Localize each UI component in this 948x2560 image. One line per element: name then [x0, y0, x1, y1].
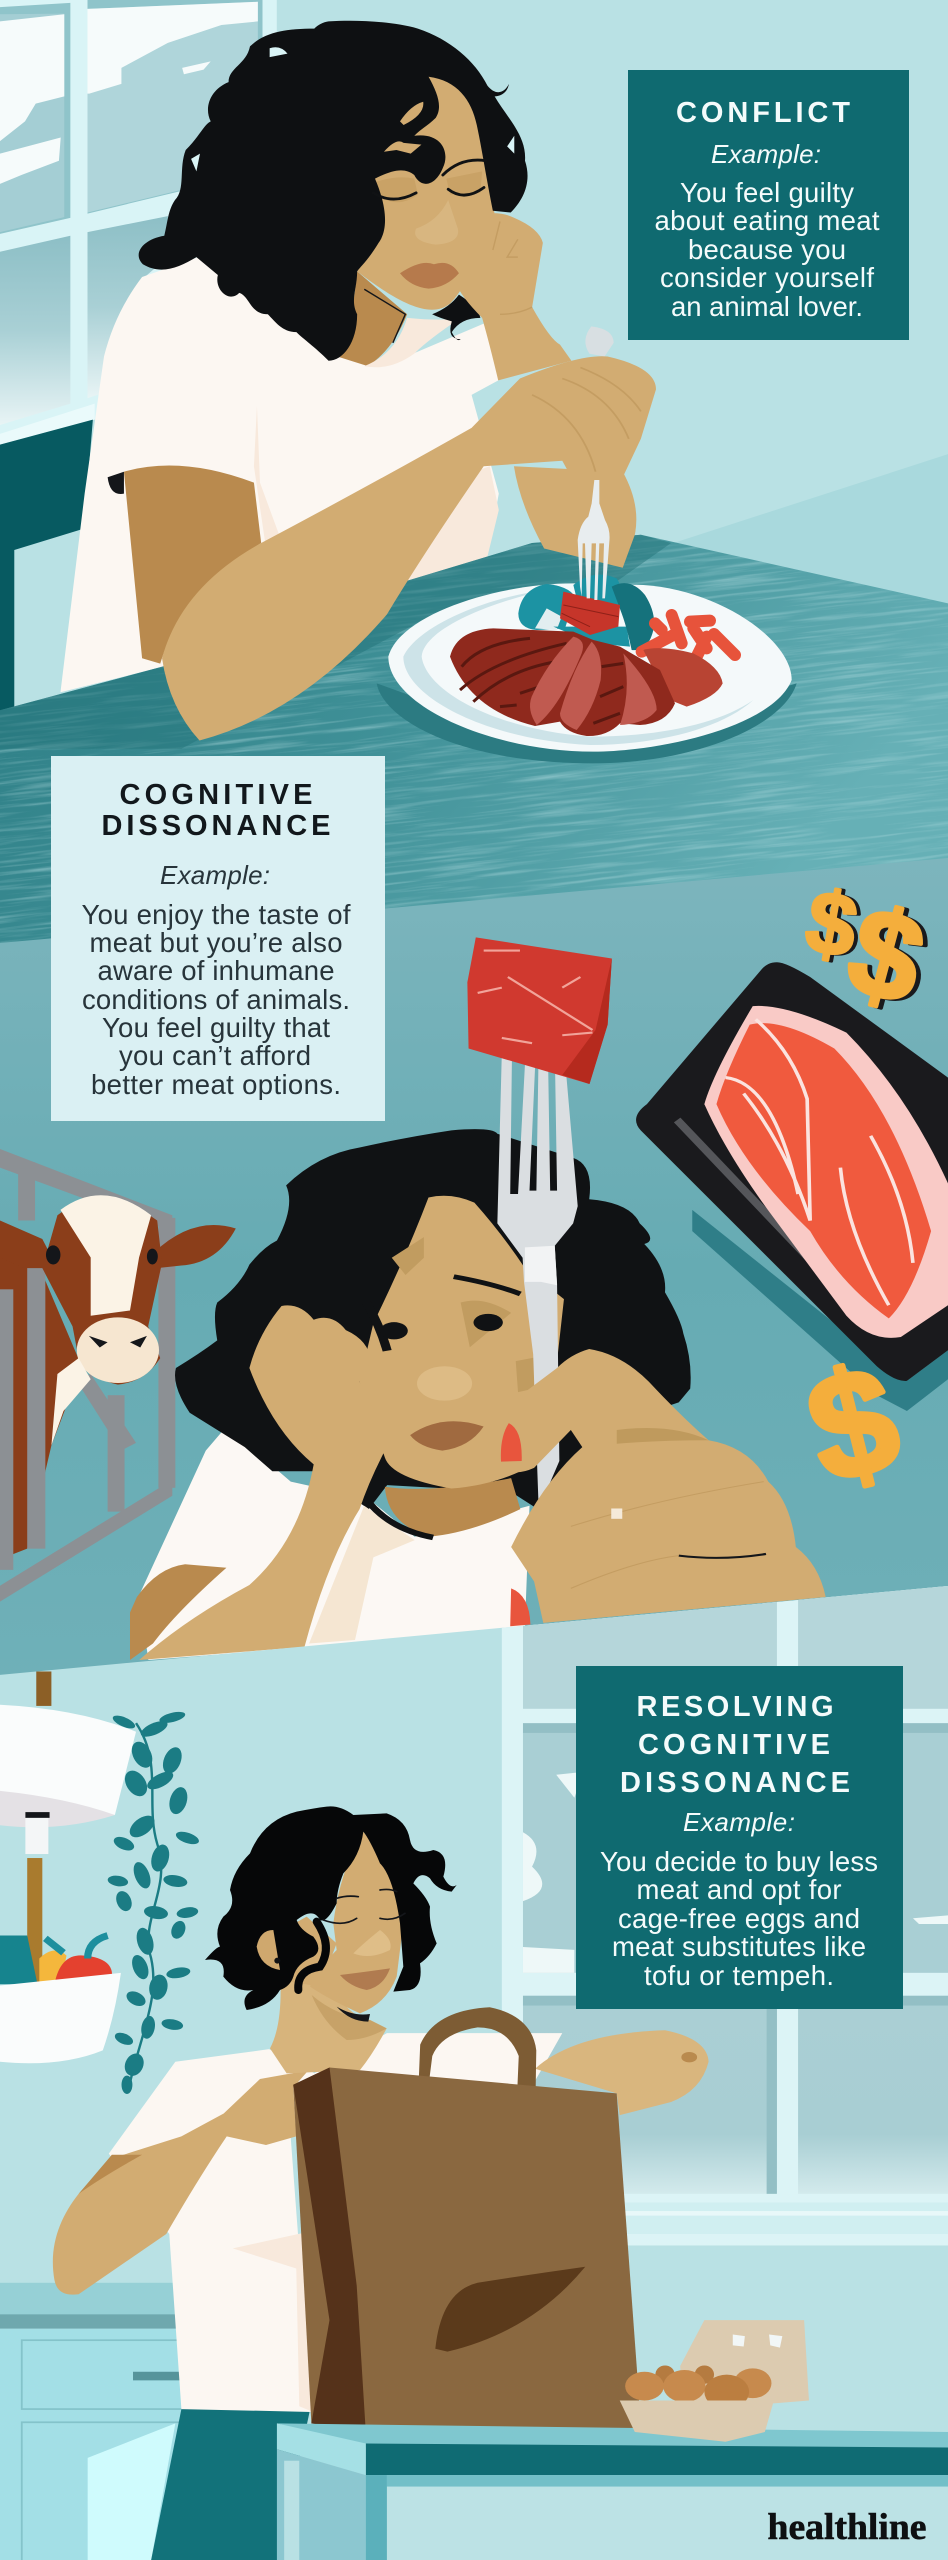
- dollar signs: $: [840, 882, 942, 1033]
- conflict body text: about eating meat: [654, 205, 880, 236]
- hair: [175, 1129, 691, 1513]
- carrots: [642, 615, 735, 657]
- pen bars: [0, 1149, 175, 1602]
- callout: conflict: [628, 70, 909, 340]
- dollar signs: $: [835, 880, 937, 1032]
- left fist and arm: [139, 1305, 385, 1660]
- conflict heading: CONFLICT: [676, 97, 850, 129]
- shirt fold shade: [233, 2231, 313, 2412]
- logo: healthline: healthline: [768, 2507, 926, 2548]
- right hand: [500, 1349, 826, 1623]
- eye shading: [375, 171, 482, 202]
- fork neck highlight: [525, 1246, 557, 1285]
- dollar signs: $: [799, 871, 864, 977]
- closed eyes and brow: [373, 160, 486, 199]
- cognitive dissonance body text: conditions of animals.: [82, 984, 350, 1015]
- chunk layers: [562, 605, 618, 627]
- paper bag: [293, 2007, 641, 2432]
- shoulder shade: [79, 2155, 142, 2194]
- panel: resolving scene: [0, 1580, 948, 2560]
- resolving body text: tofu or tempeh.: [644, 1960, 834, 1991]
- collar shade: [364, 318, 461, 367]
- red nails: [501, 1423, 530, 1626]
- dollar signs: $: [792, 1332, 914, 1516]
- resolving heading: COGNITIVE: [638, 1729, 830, 1761]
- table: [0, 535, 948, 949]
- dollar signs: [792, 871, 942, 1516]
- finger shade: [617, 1428, 709, 1444]
- lips: [410, 1421, 484, 1451]
- lips: [340, 1968, 390, 1990]
- lower curl: [432, 295, 480, 340]
- bag, counter and eggs: [277, 2007, 948, 2560]
- cognitive dissonance body text: You enjoy the taste of: [82, 899, 351, 930]
- knuckle lines: [532, 367, 641, 472]
- right steak: [643, 648, 723, 707]
- conflict body text: an animal lover.: [671, 291, 863, 322]
- neck line: [364, 289, 405, 343]
- woman's head and fist: [139, 21, 571, 380]
- cognitive dissonance body text: better meat options.: [91, 1069, 341, 1100]
- shopper head: [205, 1806, 457, 2073]
- hair gaps: [191, 47, 514, 171]
- cow head: [0, 1195, 236, 1445]
- egg carton: [620, 2320, 809, 2442]
- cognitive dissonance heading: [102, 779, 330, 842]
- fork handle top: [585, 326, 614, 357]
- tray, steak and cow: [0, 962, 948, 1602]
- resolving heading: RESOLVING: [636, 1691, 834, 1723]
- cognitive dissonance body text: meat but you’re also: [90, 927, 342, 958]
- meat chunk: [560, 592, 620, 635]
- shirt: [139, 1427, 530, 1660]
- worried woman: [130, 1048, 826, 1660]
- broccoli: [518, 575, 654, 650]
- plate shadow: [377, 683, 797, 763]
- shirt shade: [309, 1506, 415, 1643]
- resolving body text: meat substitutes like: [612, 1931, 866, 1962]
- vegetables in bowl: [0, 1936, 112, 1984]
- cognitive dissonance body text: aware of inhumane: [98, 955, 334, 986]
- wall background: [0, 0, 948, 949]
- elbow mark: [681, 2052, 697, 2062]
- window: [502, 1580, 948, 2245]
- face: [310, 1832, 403, 2013]
- main counter: [277, 2423, 948, 2560]
- ear: [257, 1930, 280, 1970]
- upper arm: [124, 466, 261, 664]
- rear counter and drawers: [0, 2283, 200, 2560]
- resolving box: [576, 1666, 903, 2009]
- shirt: [60, 257, 502, 692]
- resolving heading: DISSONANCE: [620, 1767, 850, 1799]
- kitchen background and shopper body: [0, 1580, 948, 2560]
- shirt shadow: [254, 406, 499, 581]
- plate: [388, 583, 792, 752]
- panel: conflict scene: [0, 0, 948, 943]
- callout: cognitive dissonance: [51, 756, 385, 1121]
- forehead curl: [366, 1303, 387, 1351]
- cognitive dissonance body text: you can’t afford: [119, 1040, 311, 1071]
- left arm and hand: [53, 2070, 308, 2295]
- cognitive dissonance heading: COGNITIVE: [120, 779, 312, 811]
- face: [360, 1196, 564, 1489]
- conflict body text: because you: [688, 234, 846, 265]
- dollar signs: $: [803, 871, 868, 977]
- cow body: [0, 1252, 82, 1559]
- section background: [0, 858, 948, 1680]
- fork: [497, 1048, 578, 1509]
- forehead skin patches: [384, 102, 423, 154]
- nose: [415, 200, 458, 245]
- cognitive dissonance body text: You feel guilty that: [102, 1012, 330, 1043]
- meat on fork: [467, 937, 612, 1084]
- hair: [205, 1806, 457, 2010]
- conflict body text: You feel guilty: [680, 177, 854, 208]
- earring: [274, 1958, 280, 1964]
- window and chair: [0, 0, 277, 712]
- jeans: [151, 2403, 311, 2560]
- conflict body text: [654, 177, 880, 322]
- table wood grain: [0, 538, 948, 943]
- resolving body text: You decide to buy less: [600, 1846, 878, 1877]
- cognitive dissonance body text: [82, 899, 351, 1100]
- conflict body text: consider yourself: [660, 262, 874, 293]
- plate rim shade: [403, 590, 753, 745]
- brow: [454, 1277, 520, 1294]
- fist crease: [493, 221, 532, 314]
- face shading: [392, 1237, 534, 1392]
- resolving body text: [600, 1846, 878, 1991]
- table arm shadow: [0, 535, 671, 749]
- shirt: [109, 2033, 562, 2412]
- tray shadow: [692, 1210, 948, 1411]
- shirt, table and rear arm: [0, 258, 948, 943]
- bowl: [0, 1973, 121, 2063]
- resolving heading: [620, 1691, 850, 1799]
- steak slices: [530, 637, 657, 730]
- cheek curl: [298, 1922, 326, 1990]
- hanging vine: [107, 1710, 201, 2094]
- conflict example label: Example:: [711, 139, 821, 169]
- meat tray: [636, 962, 948, 1381]
- fork: [578, 480, 610, 600]
- tray inner rim: [677, 1120, 859, 1310]
- resolving example label: Example:: [683, 1807, 795, 1837]
- fist on cheek: [455, 213, 571, 380]
- side of head: [277, 1917, 337, 1987]
- rear arm: [514, 466, 636, 568]
- lamp: [0, 1671, 136, 1984]
- sleeve edge: [108, 472, 124, 494]
- grill marks: [460, 638, 623, 723]
- face: [352, 73, 495, 310]
- sleeve arm: [130, 1564, 226, 1660]
- nose: [417, 1366, 472, 1401]
- callout: resolving cognitive dissonance: [576, 1666, 903, 2009]
- neck: [385, 1478, 520, 1537]
- finger crease: [679, 1554, 766, 1558]
- raw steak: [704, 1006, 948, 1338]
- hair: [139, 21, 528, 361]
- arm holding fork: [108, 326, 656, 740]
- main steak: [450, 628, 675, 736]
- jaw shadow: [337, 2007, 370, 2022]
- forearm and hand: [162, 356, 656, 740]
- conflict box: [628, 70, 909, 340]
- cognitive dissonance example label: Example:: [160, 860, 270, 890]
- cognitive dissonance heading: DISSONANCE: [102, 810, 330, 842]
- resolving body text: cage-free eggs and: [618, 1903, 860, 1934]
- resolving body text: meat and opt for: [636, 1874, 842, 1905]
- eyes: [380, 1322, 408, 1339]
- collar: [369, 1502, 433, 1537]
- nose: [353, 1930, 391, 1956]
- closed eyes and brows: [323, 1889, 405, 1923]
- cognitive dissonance box: [51, 756, 385, 1121]
- neck: [339, 271, 407, 366]
- gap behind hand: [582, 1423, 619, 1447]
- wall: [0, 1586, 946, 1680]
- finger lines: [571, 1482, 764, 1588]
- neck shade: [312, 1995, 387, 2040]
- lips: [400, 263, 459, 289]
- panel: cognitive dissonance scene: [0, 858, 948, 1680]
- plate of food: [377, 480, 797, 763]
- ring: [611, 1508, 622, 1519]
- right arm: [535, 2030, 709, 2115]
- neck: [270, 1963, 387, 2073]
